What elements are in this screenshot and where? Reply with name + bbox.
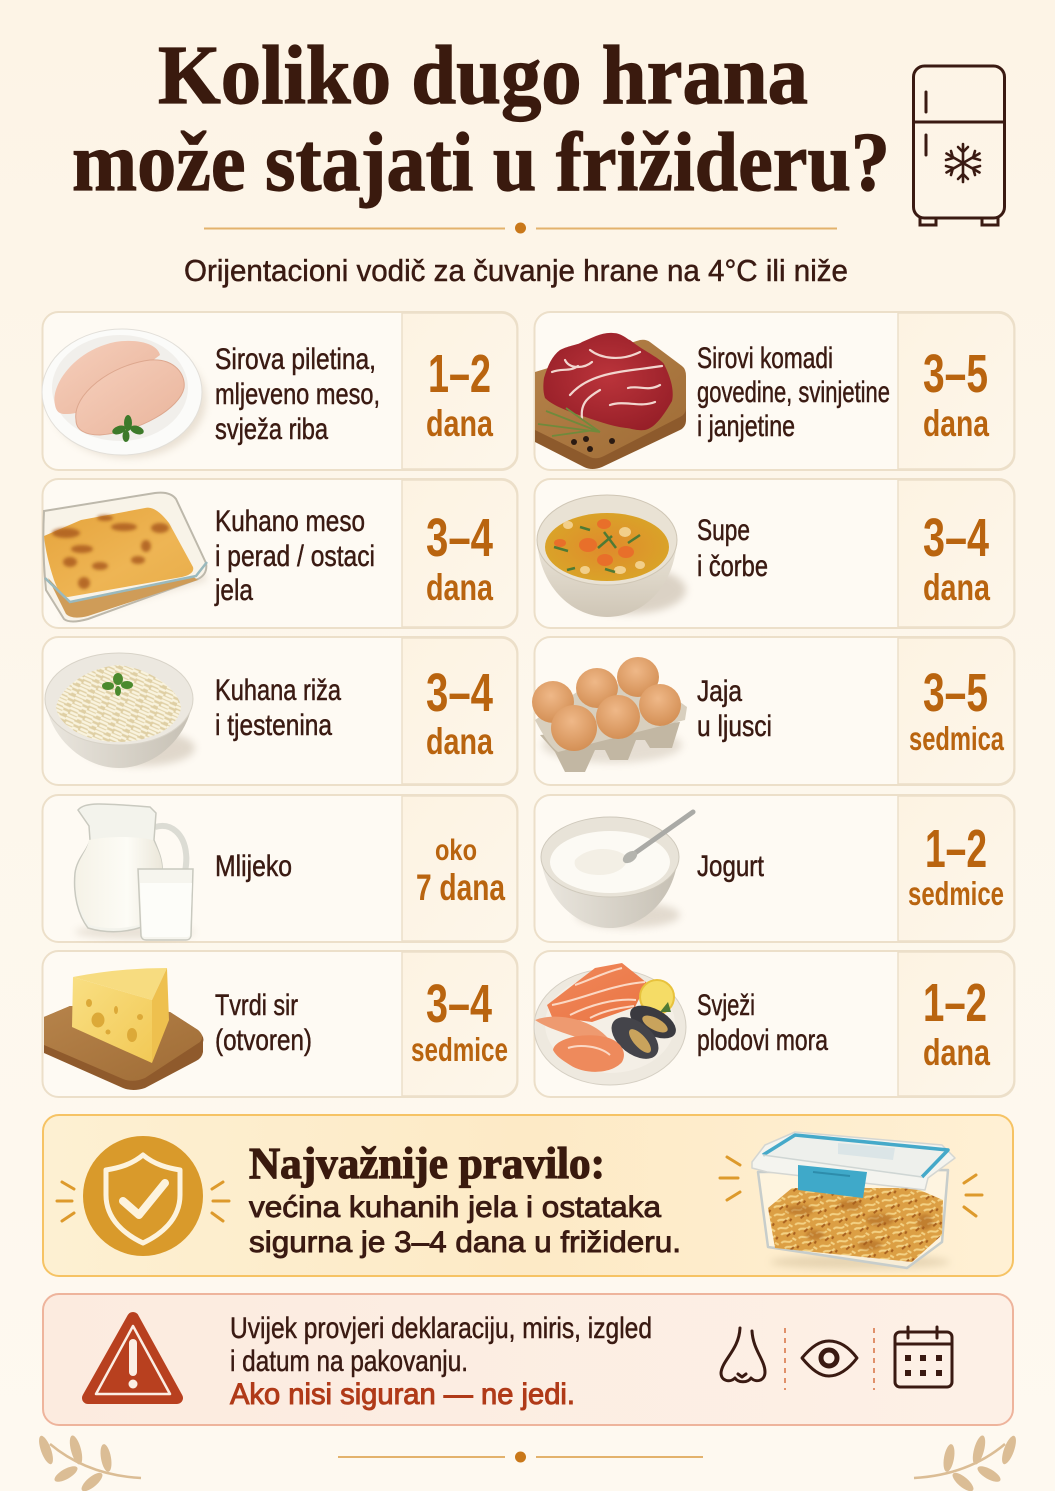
panel: eggs in shell [532,637,1014,785]
duration: 3–5 [923,344,988,404]
panel: fresh seafood [534,951,1014,1097]
duration [426,344,493,444]
title: Koliko dugo hrana [158,29,808,122]
panel: warning [43,1294,1013,1425]
label: i čorbe [697,550,768,583]
divider ornament [204,222,837,234]
label [697,342,890,443]
duration [923,973,990,1073]
label [214,505,375,607]
label [215,343,380,446]
duration: 1–2 [925,819,987,879]
photo: soup bowl [537,495,686,617]
warning text: Uvijek provjeri deklaraciju, miris, izgled [230,1312,652,1345]
duration [426,508,493,608]
icon: fridge with snowflake [914,66,1004,225]
duration: 3–4 [426,663,493,723]
label: plodovi mora [697,1024,828,1057]
duration: dana [426,403,493,444]
title: može stajati u frižideru? [72,116,890,209]
duration: dana [923,567,990,608]
warning text: Ako nisi siguran — ne jedi. [230,1378,575,1411]
label: Tvrdi sir [215,989,298,1022]
duration: dana [426,567,493,608]
label: svježa riba [215,413,328,446]
rule text [249,1191,681,1259]
label: i tjestenina [215,709,332,742]
icon: nose [721,1328,765,1382]
panel: most important rule [43,1115,1013,1276]
duration [411,974,508,1068]
label [697,514,768,583]
duration: 3–4 [426,974,492,1034]
label: (otvoren) [215,1024,312,1057]
duration [416,834,505,908]
duration: 3–4 [426,508,493,568]
decoration: right laurel [914,1434,1019,1491]
panel: soups and stews [534,479,1014,628]
label: mljeveno meso, [215,378,380,411]
label: Svježi [697,989,755,1022]
duration: 7 dana [416,867,505,908]
duration: 1–2 [428,344,491,404]
photo: rice bowl [45,653,195,768]
heading: Najvažnije pravilo: [249,1139,605,1188]
icon: calendar [895,1327,952,1387]
panel: raw chicken [42,312,518,470]
label: govedine, svinjetine [697,376,890,409]
photo: seafood platter [534,963,686,1085]
duration: sedmice [908,875,1004,912]
label: Jogurt [697,850,765,883]
label [697,675,772,743]
warning text: i datum na pakovanju. [230,1345,468,1378]
photo: eggs in carton [532,657,687,772]
decoration: left laurel [36,1434,141,1491]
label: jela [214,574,253,607]
panel: hard cheese [42,951,518,1097]
icon: eye [802,1341,857,1376]
label: Sirova piletina, [215,343,376,376]
duration [426,663,493,762]
duration: 1–2 [923,973,987,1033]
label: Mlijeko [215,850,292,883]
photo: cheese wedge on board [44,968,203,1090]
panel: raw beef, pork, lamb [534,312,1014,470]
photo: baked dish in glass tray [43,493,208,622]
duration: dana [426,721,493,762]
warning text [230,1312,652,1411]
label: Kuhana riža [215,674,341,707]
label: Supe [697,514,750,547]
photo: milk jug and glass [75,804,195,940]
icon: warning triangle [88,1318,177,1398]
panel: cooked rice and pasta [42,637,518,785]
duration [923,508,990,608]
duration: 3–4 [923,508,989,568]
panel: cooked meat and leftovers [42,479,518,628]
duration [923,344,989,444]
duration: 3–5 [923,663,988,723]
photo: meat on board [535,333,686,469]
divider [785,1328,874,1390]
subtitle: Orijentacioni vodič za čuvanje hrane na 4°C ili niže [184,253,848,288]
icon: shield with check [57,1136,229,1256]
label: u ljusci [697,710,772,743]
footer ornament [338,1452,703,1462]
duration [909,663,1004,757]
duration: dana [923,1032,990,1073]
duration: dana [923,403,989,444]
label [697,989,828,1057]
duration: sedmica [909,720,1004,757]
title [72,29,890,209]
panel: milk [42,795,518,942]
duration [908,819,1004,912]
label: i perad / ostaci [215,540,375,573]
photo: food container with lid [720,1132,982,1269]
duration: oko [435,834,477,867]
photo: chicken on plate [42,329,206,458]
rule text: sigurna je 3–4 dana u frižideru. [249,1226,681,1259]
label [215,989,312,1057]
label: Kuhano meso [215,505,365,538]
label: i janjetine [697,410,795,443]
photo: yogurt bowl with spoon [541,812,693,928]
label [215,674,341,742]
label: Jaja [697,675,742,708]
rule text: većina kuhanih jela i ostataka [249,1191,661,1224]
panel: yogurt [534,795,1014,942]
label: Sirovi komadi [697,342,833,375]
duration: sedmice [411,1031,508,1068]
